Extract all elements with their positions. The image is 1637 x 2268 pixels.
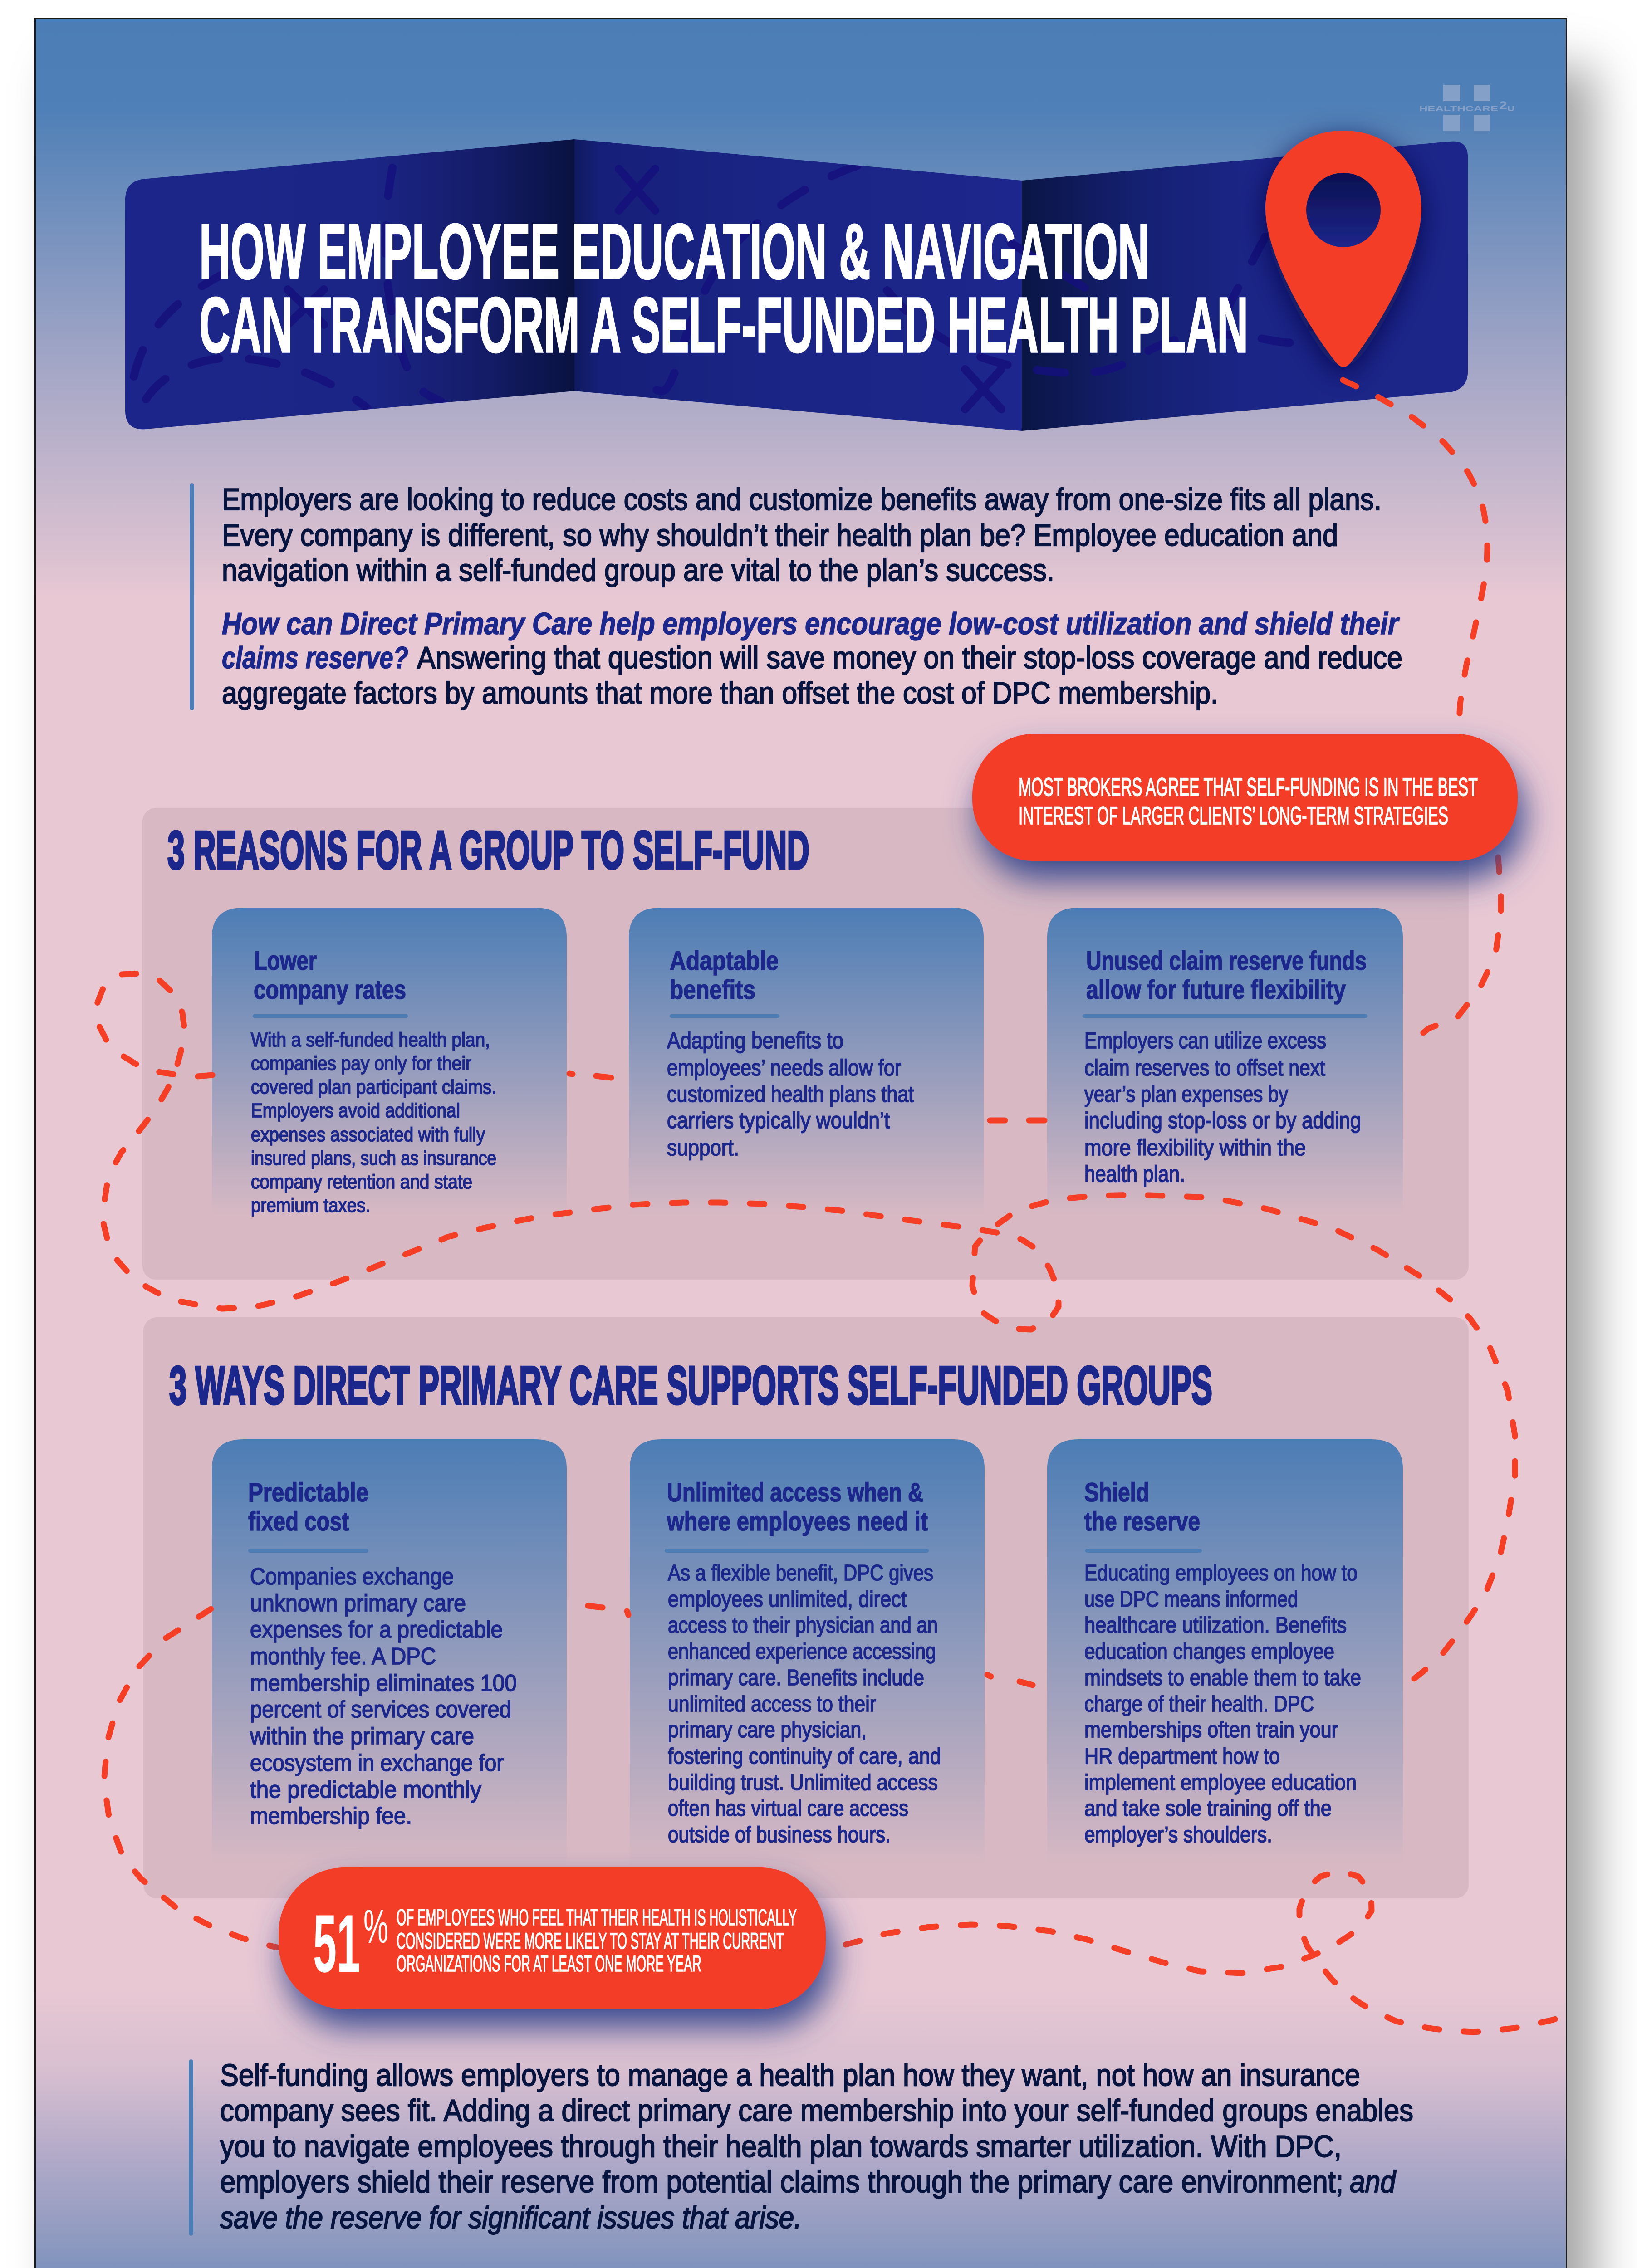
closing text block: and: [1350, 2165, 1397, 2199]
intro text block: Answering that question will save money on their stop-loss coverage and reduce: [417, 640, 1402, 675]
logo: Healthcare2U: HEALTHCARE: [1419, 104, 1498, 113]
closing text block: save the reserve for significant issues that arise.: [220, 2200, 802, 2235]
card: unused claim reserve funds: Unused claim reserve funds: [1086, 946, 1367, 976]
logo: Healthcare2U: U: [1507, 104, 1514, 113]
callout: 51 percent statistic: CONSIDERED WERE MORE LIKELY TO STAY AT THEIR CURRENT: [397, 1928, 784, 1954]
card: lower company rates: Lower: [254, 946, 317, 976]
logo: Healthcare2U: [1419, 85, 1514, 131]
card: shield the reserve: education changes employee: [1084, 1639, 1334, 1664]
card: lower company rates: company retention and state: [251, 1171, 472, 1193]
heading: 3 reasons: 3 REASONS FOR A GROUP TO SELF-FUND: [167, 820, 809, 880]
intro text block: Every company is different, so why shouldn’t their health plan be? Employee education and: [222, 518, 1338, 552]
card: unused claim reserve funds: allow for future flexibility: [1086, 975, 1346, 1005]
card: unlimited access: primary care physician,: [668, 1718, 867, 1742]
card: lower company rates: With a self-funded health plan,: [251, 1029, 490, 1051]
card: unlimited access: access to their physician and an: [668, 1613, 938, 1637]
title: [199, 207, 1248, 369]
card: adaptable benefits: employees’ needs allow for: [667, 1055, 901, 1080]
card: predictable fixed cost: membership eliminates 100: [250, 1670, 517, 1696]
card: predictable fixed cost: the predictable monthly: [250, 1777, 481, 1803]
panel: 3 reasons to self-fund: [142, 808, 1469, 1280]
closing text block: you to navigate employees through their health plan towards smarter utilization. With DPC,: [220, 2129, 1342, 2164]
card: unlimited access: As a flexible benefit, DPC gives: [668, 1561, 933, 1585]
card: unused claim reserve funds: claim reserves to offset next: [1084, 1055, 1325, 1080]
card: predictable fixed cost: membership fee.: [250, 1803, 412, 1829]
card: shield the reserve: use DPC means informed: [1084, 1587, 1298, 1612]
card: unlimited access: building trust. Unlimited access: [668, 1770, 938, 1795]
card: shield the reserve: Educating employees on how to: [1084, 1561, 1358, 1585]
closing text block: employers shield their reserve from potential claims through the primary care environment;: [220, 2165, 1343, 2199]
card: predictable fixed cost: within the primary care: [250, 1723, 474, 1750]
card: predictable fixed cost: ecosystem in exchange for: [250, 1750, 504, 1776]
intro text block: How can Direct Primary Care help employers encourage low-cost utilization and shield their: [222, 606, 1400, 641]
card: adaptable benefits: Adapting benefits to: [667, 1028, 843, 1053]
intro text block: [190, 482, 1402, 710]
card: lower company rates: premium taxes.: [251, 1194, 370, 1217]
card: shield the reserve: HR department how to: [1084, 1744, 1280, 1769]
callout: brokers agree: [972, 734, 1518, 861]
panel: 3 ways DPC supports self-funded groups: [143, 1317, 1469, 1898]
callout: 51 percent statistic: ORGANIZATIONS FOR AT LEAST ONE MORE YEAR: [397, 1951, 701, 1976]
closing text block: company sees fit. Adding a direct primary care membership into your self-funded groups enables: [220, 2093, 1413, 2128]
card: lower company rates: companies pay only for their: [251, 1052, 471, 1075]
card: unlimited access: enhanced experience accessing: [668, 1639, 936, 1664]
card: shield the reserve: implement employee education: [1084, 1770, 1357, 1795]
logo: Healthcare2U: 2: [1499, 99, 1507, 112]
card: adaptable benefits: Adaptable: [670, 946, 779, 976]
card: adaptable benefits: [629, 908, 984, 1217]
dashed route from map pin through the page: [97, 380, 1569, 2032]
card: shield the reserve: charge of their health. DPC: [1084, 1692, 1314, 1716]
card: lower company rates: company rates: [254, 975, 406, 1005]
card: lower company rates: insured plans, such as insurance: [251, 1147, 496, 1169]
intro text block: aggregate factors by amounts that more than offset the cost of DPC membership.: [222, 676, 1218, 710]
card: predictable fixed cost: fixed cost: [248, 1507, 349, 1536]
card: unlimited access: often has virtual care access: [668, 1796, 908, 1821]
intro text block: claims reserve?: [222, 640, 408, 675]
card: lower company rates: covered plan participant claims.: [251, 1076, 496, 1098]
card: lower company rates: expenses associated with fully: [251, 1124, 485, 1146]
stat: 51%: %: [363, 1900, 388, 1953]
intro text block: navigation within a self-funded group are vital to the plan’s success.: [222, 553, 1054, 587]
card: adaptable benefits: benefits: [670, 975, 755, 1005]
card: predictable fixed cost: expenses for a predictable: [250, 1617, 503, 1643]
callout: 51 percent statistic: OF EMPLOYEES WHO FEEL THAT THEIR HEALTH IS HOLISTICALLY: [397, 1905, 797, 1930]
folded map banner: [125, 139, 1468, 431]
card: unlimited access: fostering continuity of care, and: [668, 1744, 941, 1769]
card: lower company rates: Employers avoid additional: [251, 1100, 460, 1122]
card: shield the reserve: the reserve: [1084, 1507, 1200, 1536]
card: shield the reserve: and take sole training off the: [1084, 1796, 1332, 1821]
card: predictable fixed cost: monthly fee. A DPC: [250, 1643, 436, 1670]
card: unused claim reserve funds: year’s plan expenses by: [1084, 1081, 1288, 1107]
card: adaptable benefits: carriers typically wouldn’t: [667, 1108, 890, 1133]
card: unlimited access: Unlimited access when &: [667, 1478, 923, 1507]
card: lower company rates: [212, 908, 567, 1217]
card: shield the reserve: Shield: [1084, 1478, 1149, 1507]
card: adaptable benefits: support.: [667, 1135, 739, 1160]
card: shield the reserve: mindsets to enable them to take: [1084, 1666, 1361, 1690]
card: unlimited access: primary care. Benefits include: [668, 1666, 924, 1690]
card: predictable fixed cost: Predictable: [248, 1478, 368, 1507]
card: shield the reserve: healthcare utilization. Benefits: [1084, 1613, 1347, 1637]
card: shield the reserve: memberships often train your: [1084, 1718, 1338, 1742]
card: unlimited access: outside of business hours.: [668, 1823, 891, 1847]
card: unlimited access: where employees need it: [667, 1507, 928, 1536]
card: unused claim reserve funds: Employers can utilize excess: [1084, 1028, 1326, 1053]
card: shield the reserve: employer’s shoulders.: [1084, 1823, 1272, 1847]
card: predictable fixed cost: [212, 1439, 567, 1867]
stat: 51%: 51: [313, 1898, 360, 1989]
card: unused claim reserve funds: more flexibility within the: [1084, 1135, 1306, 1160]
closing text block: [189, 2058, 1413, 2236]
closing text block: Self-funding allows employers to manage a health plan how they want, not how an insurance: [220, 2058, 1360, 2092]
card: unlimited access: [630, 1439, 985, 1867]
card: unused claim reserve funds: health plan.: [1084, 1161, 1185, 1187]
card: adaptable benefits: customized health plans that: [667, 1081, 914, 1107]
card: predictable fixed cost: Companies exchange: [250, 1564, 454, 1590]
callout: 51 percent statistic: [279, 1867, 826, 2009]
card: unlimited access: unlimited access to their: [668, 1692, 876, 1716]
card: unused claim reserve funds: [1047, 908, 1403, 1217]
card: unlimited access: employees unlimited, direct: [668, 1587, 907, 1612]
card: unused claim reserve funds: including stop-loss or by adding: [1084, 1108, 1361, 1133]
intro text block: Employers are looking to reduce costs and customize benefits away from one-size fits all plans.: [222, 482, 1382, 517]
card: shield the reserve: [1047, 1439, 1403, 1867]
card: predictable fixed cost: unknown primary care: [250, 1590, 466, 1617]
icon: map location pin: [1265, 131, 1421, 367]
card: predictable fixed cost: percent of services covered: [250, 1696, 511, 1723]
